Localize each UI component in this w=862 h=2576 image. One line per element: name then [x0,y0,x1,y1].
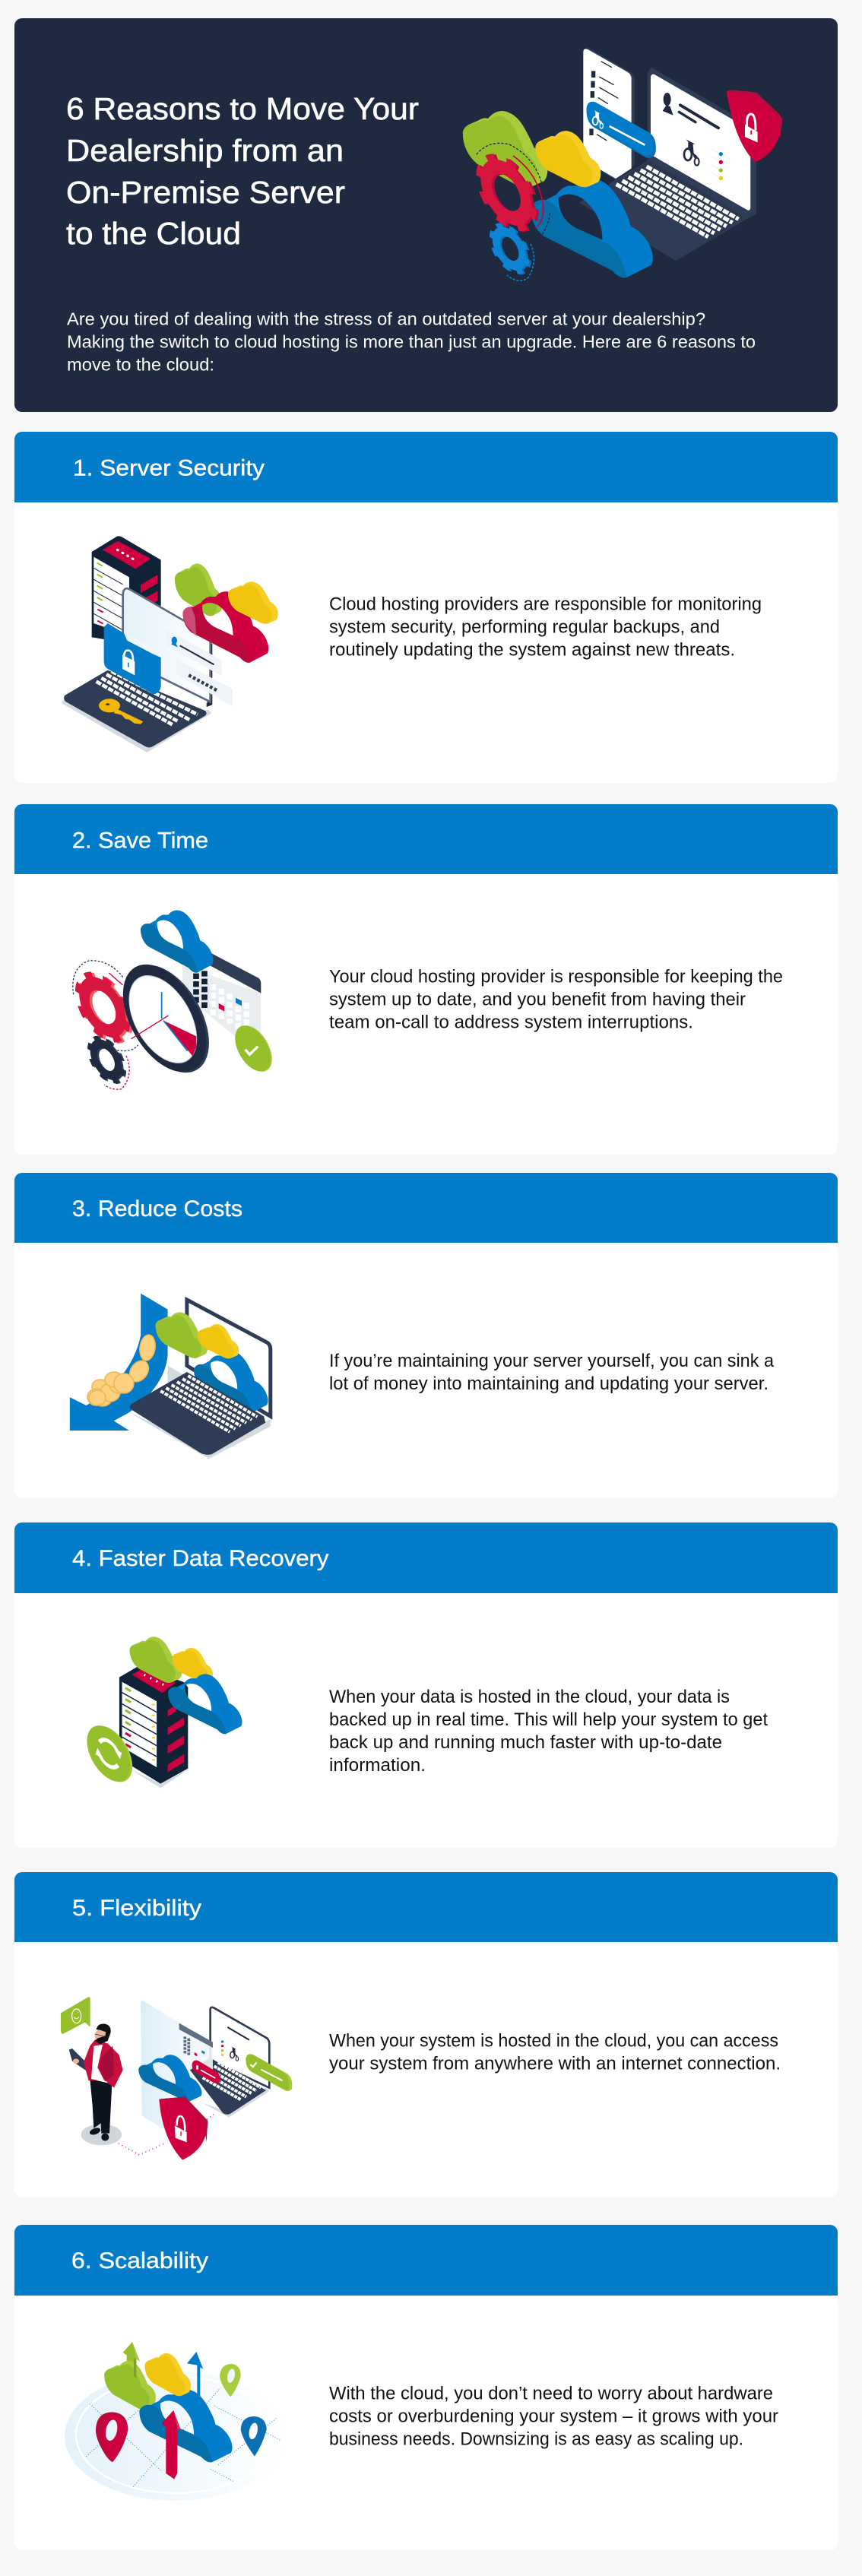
heading: 5. Flexibility [72,1896,201,1921]
dashed arcs [542,211,550,234]
laptop base [62,644,212,753]
red gear [480,145,536,240]
blue cloud [194,1351,268,1413]
body text: system security, performing regular backups, and [329,617,720,638]
header bar [14,804,838,874]
illustration: map, clouds, arrows and pins [65,2342,285,2501]
body text: business needs. Downsizing is as easy as scaling up. [329,2429,743,2450]
red pill [192,2061,220,2083]
green cloud [175,563,223,616]
header bar [14,1522,838,1593]
intro text [67,309,756,374]
intro text: move to the cloud: [67,354,214,374]
heading: 1. Server Security [73,456,265,481]
body text [329,2031,781,2074]
red arrow [162,2410,181,2479]
gold coins [87,1334,157,1406]
laptop screen [187,1300,271,1416]
blue gear [492,217,529,280]
panel: 2. Save Time [14,804,838,1155]
body text: lot of money into maintaining and updating your server. [329,1374,769,1394]
body text: If you’re maintaining your server yourself, you can sink a [329,1351,775,1371]
blue cloud [139,2389,233,2462]
red arc arrow [513,156,544,227]
key [99,699,143,724]
red pin [96,2412,128,2462]
red arc [104,973,129,1089]
calendar overlay [179,2023,213,2070]
body text: Cloud hosting providers are responsible for monitoring [329,594,762,615]
login window [123,588,233,706]
server tower [119,1665,190,1788]
blue pin [241,2416,267,2457]
green pin [220,2364,241,2397]
illustration: server, laptop, folder and key [62,536,278,753]
clock [123,945,209,1092]
header bar [14,1872,838,1942]
blue cloud [531,179,653,278]
panel: 6. Scalability [14,2225,838,2550]
heading: 6. Scalability [71,2248,208,2273]
title: On-Premise Server [66,175,345,210]
calendar [182,952,261,1039]
dashed orbit [477,143,542,185]
body text [329,594,762,661]
yellow cloud [198,1324,239,1358]
body text: Your cloud hosting provider is responsible for keeping the [329,967,783,987]
panel: 4. Faster Data Recovery [14,1522,838,1848]
header bar [14,1173,838,1243]
heading: 2. Save Time [72,829,208,854]
body text [329,2384,778,2450]
intro text: Making the switch to cloud hosting is more than just an upgrade. Here are 6 reasons to [67,331,756,351]
blue arrow [187,2352,203,2407]
yellow cloud [535,131,601,187]
check badge [235,1017,272,1080]
illustration: person, laptop, cloud and shield [61,1997,292,2160]
body text: system up to date, and you benefit from having their [329,990,746,1010]
person [69,2024,123,2145]
green cloud [463,111,547,188]
body text: When your data is hosted in the cloud, your data is [329,1687,730,1707]
title: 6 Reasons to Move Your [66,91,419,126]
panel: 3. Reduce Costs [14,1173,838,1498]
yellow cloud [173,1648,213,1682]
panel: 1. Server Security [14,432,838,783]
title: Dealership from an [66,133,344,168]
body text: When your system is hosted in the cloud, you can access [329,2031,778,2052]
illustration: cloud, laptop, gears and shield [463,47,782,280]
header bar [14,432,838,502]
panel: 5. Flexibility [14,1872,838,2197]
green pill [246,2054,292,2091]
red gear [78,964,130,1051]
illustration: server, clouds and refresh badge [87,1637,242,1792]
dark gear [90,1031,125,1089]
title: to the Cloud [66,216,241,251]
shield [159,2096,208,2160]
laptop [190,2007,269,2118]
body text: information. [329,1755,426,1776]
laptop base [129,1366,271,1459]
folder with lock [104,623,161,694]
refresh badge [87,1715,132,1792]
body text: your system from anywhere with an internet connection. [329,2054,781,2074]
blue search pill [587,102,656,158]
body text: backed up in real time. This will help your system to get [329,1709,768,1730]
translucent panel [141,2001,215,2128]
body text: With the cloud, you don’t need to worry about hardware [329,2384,773,2404]
dotted link [119,2113,215,2155]
illustration: clock, gears, calendar and cloud [73,911,272,1092]
blue down arrow [70,1294,168,1431]
document panel [583,47,635,180]
header bar [14,2225,838,2296]
intro text: Are you tired of dealing with the stress of an outdated server at your dealership? [67,309,705,328]
green cloud [130,1637,182,1683]
laptop [579,67,756,260]
green cloud [104,2361,156,2410]
body text: back up and running much faster with up-to-date [329,1732,722,1753]
green cloud [156,1312,208,1358]
body text [329,1351,775,1394]
map disc [65,2372,285,2501]
red cloud [183,591,268,663]
body text: costs or overburdening your system – it grows with your [329,2406,778,2427]
body text: routinely updating the system against new threats. [329,640,735,661]
shield [727,90,782,162]
server [92,536,161,644]
blue cloud [141,911,214,973]
heading: 4. Faster Data Recovery [72,1546,329,1571]
dashed orbits [73,961,124,994]
illustration: arrow, coins and laptop [70,1294,271,1459]
speech bubble [61,1997,90,2034]
yellow cloud [144,2353,191,2396]
blue cloud [168,1674,242,1734]
title [66,91,419,251]
body text [329,967,783,1033]
body text: team on-call to address system interruptions. [329,1012,693,1033]
panel: hero intro [14,18,838,412]
blue cloud [138,2055,201,2102]
heading: 3. Reduce Costs [72,1196,242,1221]
yellow cloud [228,581,278,624]
body text [329,1687,768,1776]
green arrow [123,2342,140,2379]
